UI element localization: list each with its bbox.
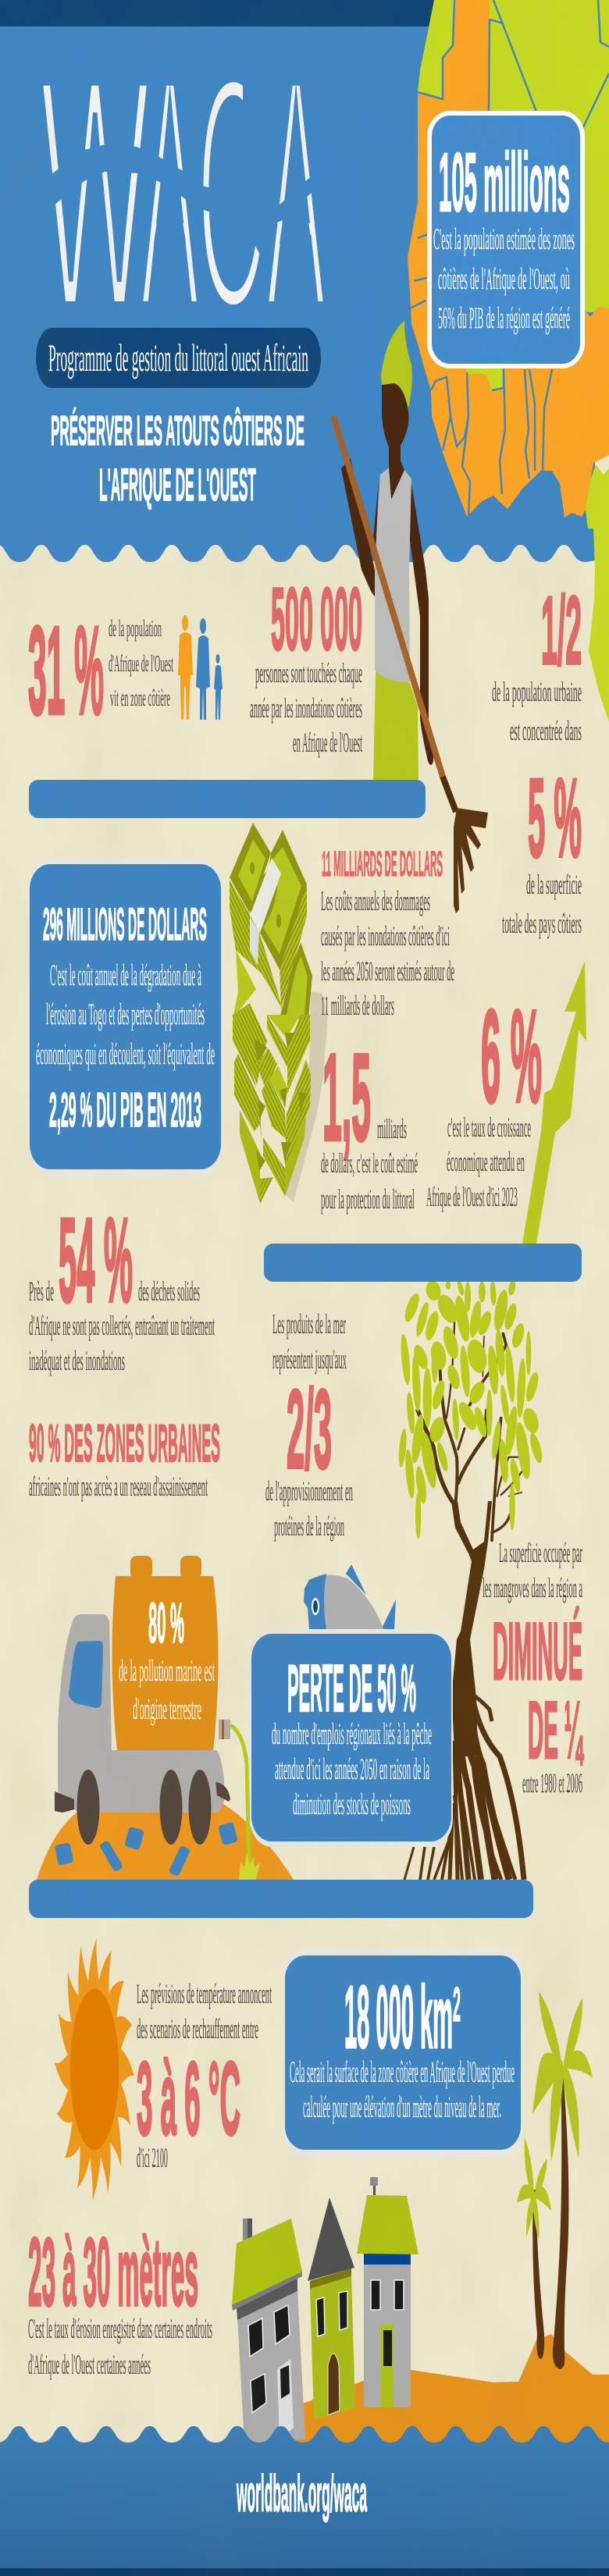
title: WACA logo: W bbox=[40, 8, 151, 379]
text: des déchets solides bbox=[138, 1276, 200, 1307]
house: green with dark roof bbox=[308, 2197, 355, 2419]
heading bbox=[51, 407, 304, 511]
stat: mangroves bbox=[483, 1537, 584, 1799]
stat: 31 % bbox=[28, 600, 173, 740]
text: Les prévisions de température annoncent bbox=[137, 1978, 272, 2009]
illustration: tanker truck: d'origine terrestre bbox=[133, 1692, 201, 1726]
illustration: person with rake bbox=[334, 321, 456, 812]
top dark band bbox=[0, 0, 437, 27]
illustration: mound with bottles bbox=[37, 1798, 294, 1880]
illustration: tanker truck bbox=[55, 1556, 260, 1880]
stat: 6 % bbox=[426, 983, 542, 1212]
footer blue band with wave bbox=[0, 2426, 609, 2568]
stat: 11 milliards bbox=[321, 844, 454, 1021]
text: l'érosion au Togo et des pertes d'opportunités bbox=[46, 998, 205, 1031]
text: 3 à 6 °C bbox=[137, 2041, 240, 2157]
text: de la pollution marine est bbox=[119, 1654, 215, 1688]
title: WACA logo: A bbox=[141, 8, 200, 379]
stat: 2/3 bbox=[265, 1308, 353, 1542]
header blue background with wave edge bbox=[0, 0, 595, 562]
panel: 296 millions bbox=[30, 859, 221, 1176]
blue bar 2 bbox=[264, 1244, 582, 1282]
blue bar 3 bbox=[29, 1880, 533, 1918]
stat: 23 à 30 mètres bbox=[28, 2219, 212, 2380]
illustration: tanker truck: 80 % bbox=[148, 1592, 184, 1655]
house: grey with green roof bbox=[232, 2218, 305, 2443]
stat: 54 %: Près de bbox=[29, 1276, 54, 1307]
text: de l'approvisionnement en bbox=[265, 1475, 353, 1507]
tree with mangrove roots bbox=[397, 1279, 544, 1880]
text: 500 000 bbox=[271, 570, 362, 668]
stat: 54 %: 54 % bbox=[59, 1194, 133, 1327]
stat: 90 % bbox=[29, 1414, 220, 1502]
stat: 54 %: inadéquat et des inondations bbox=[29, 1345, 125, 1376]
stat: temperature bbox=[137, 1978, 272, 2173]
icon: rake head bbox=[454, 808, 488, 913]
text: 2/3 bbox=[287, 1368, 332, 1492]
text: A bbox=[266, 8, 326, 379]
panel: 18 000 km2 bbox=[283, 1948, 522, 2157]
programme pill bbox=[36, 328, 321, 388]
icon: large palm bbox=[532, 1991, 593, 2369]
text: de la population bbox=[109, 614, 162, 642]
house: grey with navy band bbox=[357, 2177, 418, 2407]
text: L'AFRIQUE DE L'OUEST bbox=[99, 460, 256, 511]
stat: 1,5: 1,5 bbox=[322, 1029, 371, 1166]
icon: growth arrow bbox=[522, 961, 586, 1244]
stat: 1/2 bbox=[492, 578, 582, 746]
text: en Afrique de l'Ouest bbox=[293, 727, 362, 758]
panel: perte de 50 % bbox=[250, 1629, 453, 1847]
ground island bbox=[211, 2334, 609, 2447]
bottom dark band bbox=[0, 2568, 609, 2576]
text: 2,29 % DU PIB EN 2013 bbox=[49, 1083, 201, 1137]
text: Les produits de la mer bbox=[272, 1308, 346, 1340]
stat: 31 %: 31 % bbox=[28, 600, 104, 740]
map of West Africa bbox=[408, 0, 609, 722]
stat: 500 000 bbox=[250, 570, 362, 758]
text: d'Afrique de l'Ouest bbox=[109, 649, 173, 677]
icon: banknote braid bbox=[230, 823, 328, 1204]
panel: 18 000 km2: 2 bbox=[453, 1978, 461, 2032]
icon: family bbox=[178, 615, 223, 720]
text: protéines de la région bbox=[274, 1510, 344, 1542]
stat: 5 % bbox=[502, 756, 582, 939]
icon: sun bbox=[55, 1937, 134, 2201]
text: représentent jusqu'aux bbox=[272, 1343, 347, 1375]
stat: 11 milliards: 11 milliards de dollars bbox=[321, 990, 394, 1021]
stat: 54 % bbox=[29, 1194, 215, 1376]
text: C'est le coût annuel de la dégradation due à bbox=[50, 959, 201, 992]
text: d'Afrique de l'Ouest certaines années bbox=[28, 2349, 151, 2380]
blue bar 1 bbox=[29, 780, 426, 818]
icon: small palm bbox=[517, 2137, 551, 2359]
text: personnes sont touchées chaque bbox=[255, 657, 362, 688]
stat: temperature: d'ici 2100 bbox=[137, 2142, 168, 2173]
stat: 1,5 bbox=[321, 1029, 418, 1215]
callout: 105 millions bbox=[429, 113, 582, 366]
text: vit en zone côtière bbox=[110, 684, 170, 711]
text: milliards bbox=[377, 1113, 407, 1144]
text: des scenarios de rechauffement entre bbox=[137, 2013, 258, 2044]
title: WACA logo: C bbox=[197, 8, 265, 379]
icon: fish bbox=[304, 1564, 396, 1630]
